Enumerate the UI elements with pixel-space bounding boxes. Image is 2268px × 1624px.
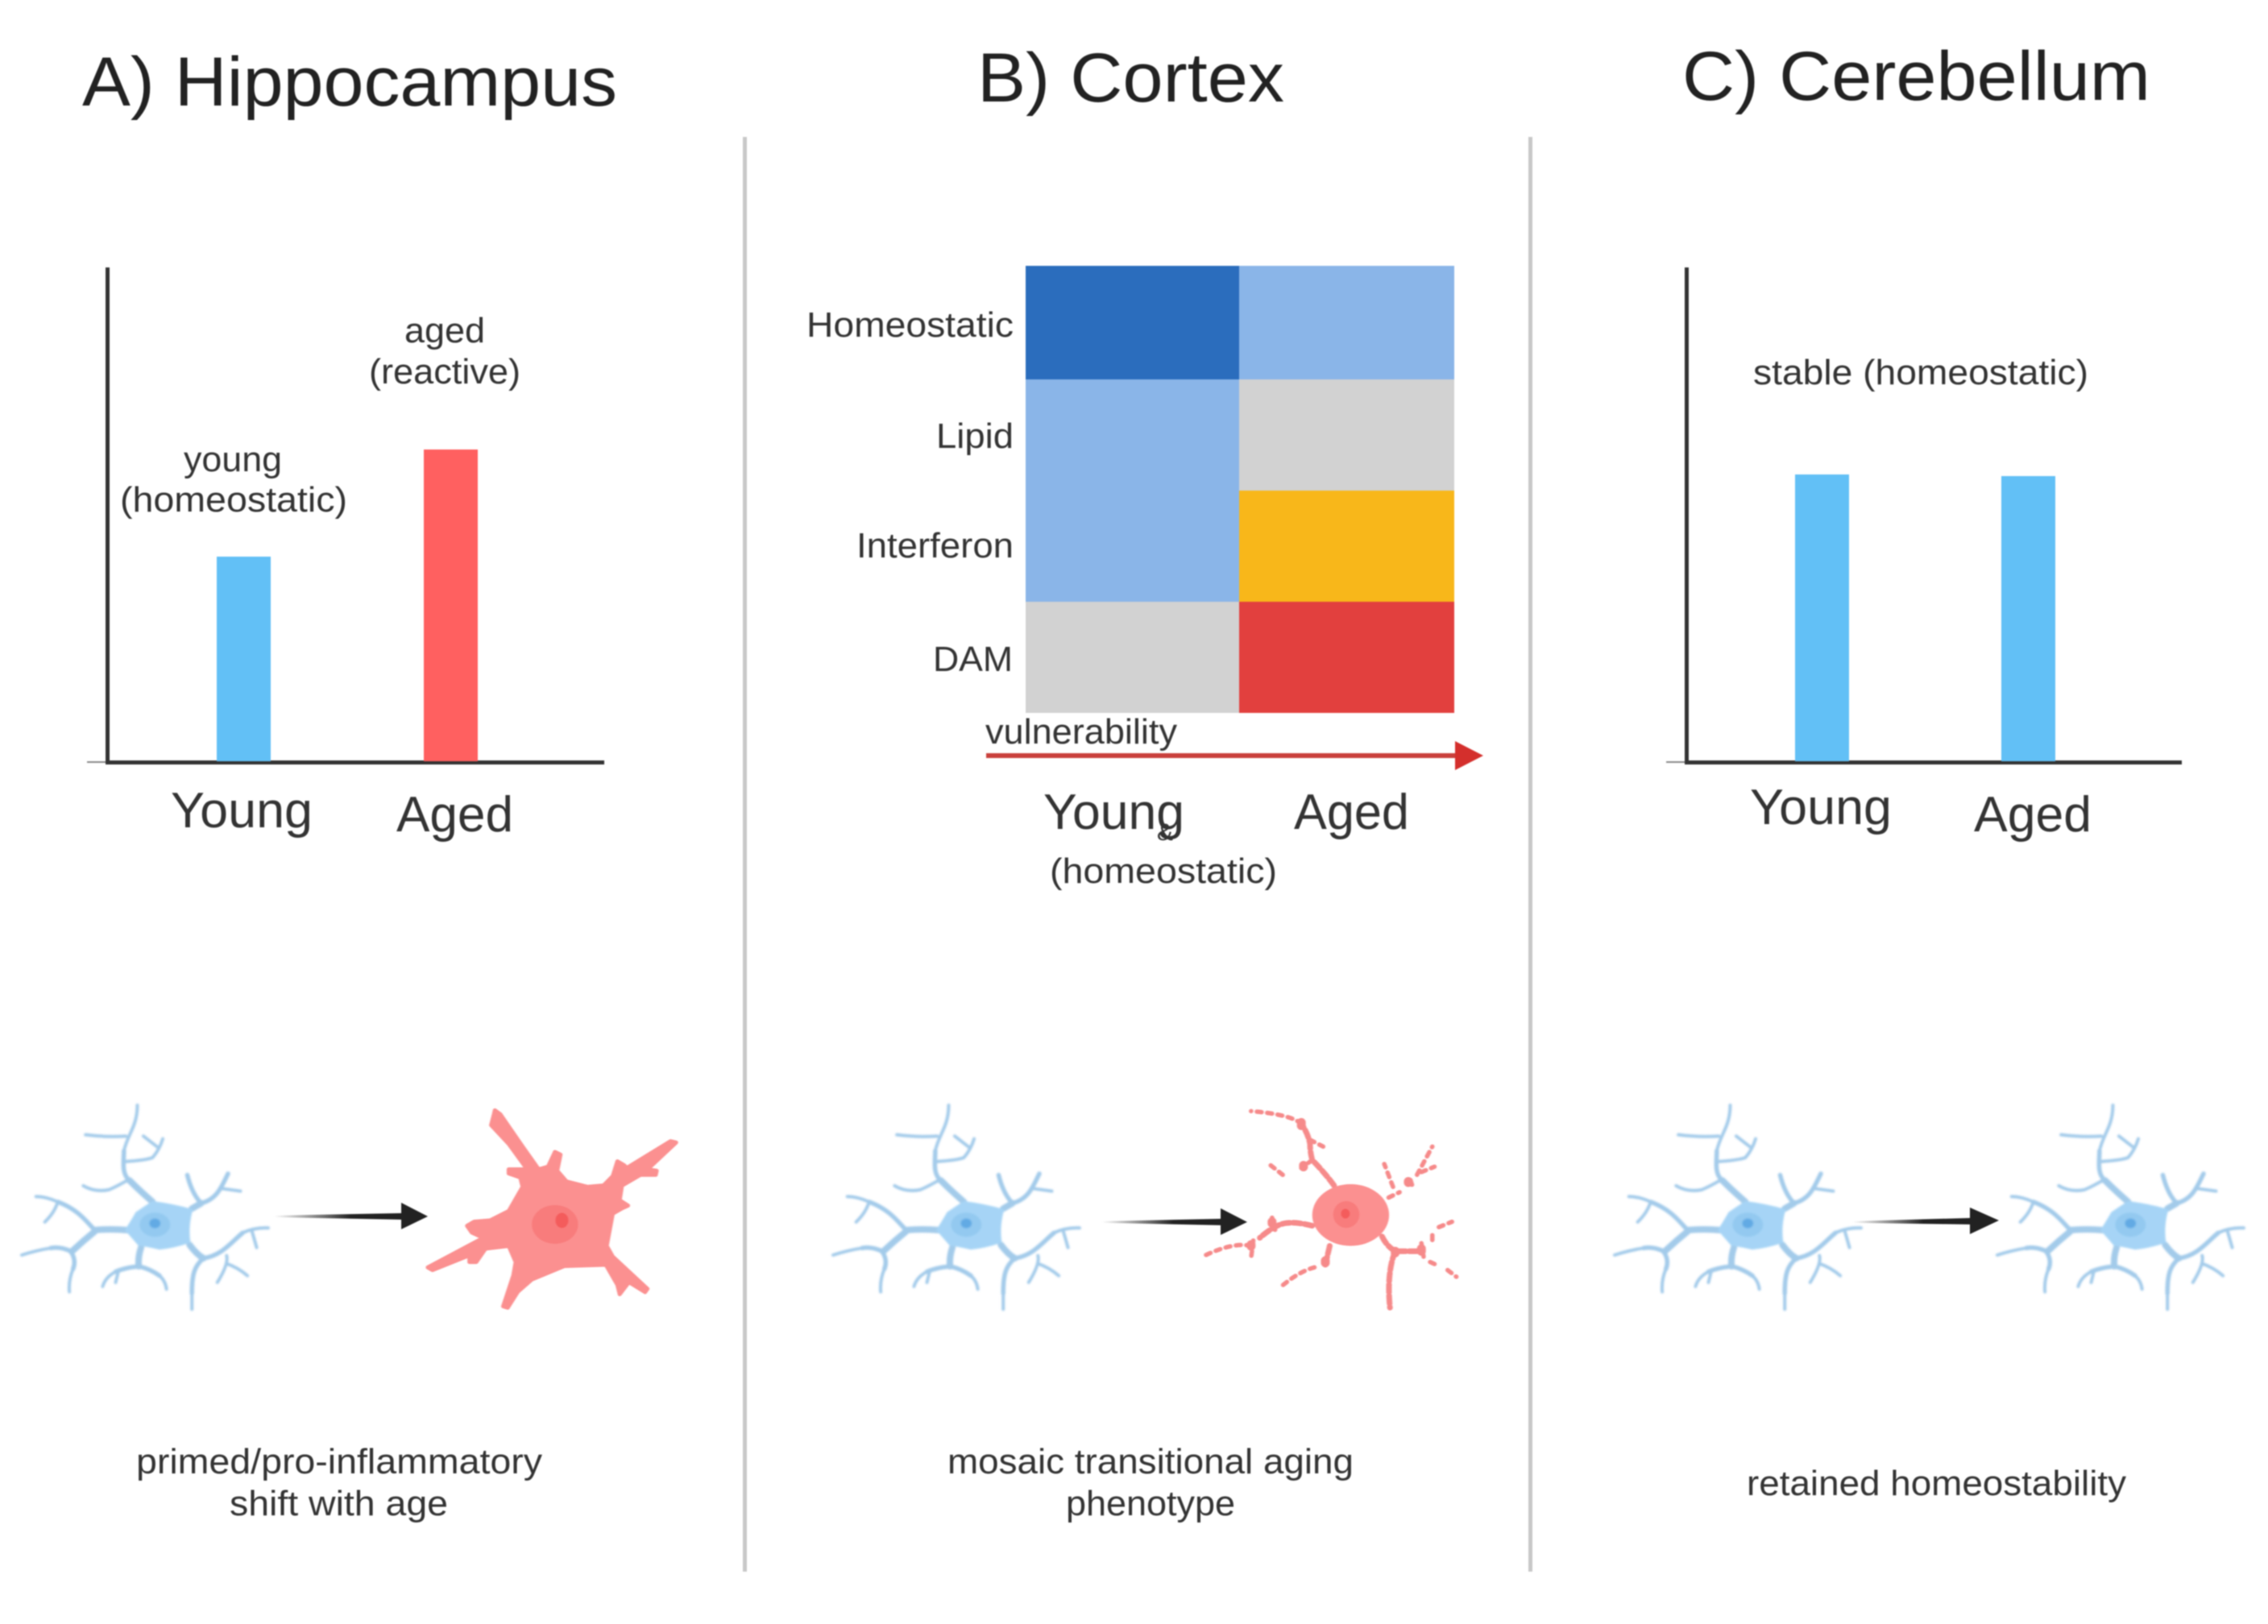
x label: Aged: Aged — [1294, 785, 1409, 840]
label: vulnerability: vulnerability — [985, 712, 1177, 752]
caption: hippocampus: primed/pro-inflammatory — [136, 1442, 542, 1481]
caption: hippocampus: shift with age — [230, 1484, 448, 1523]
caption: hippocampus — [136, 1442, 542, 1523]
label: aged reactive: (reactive) — [369, 352, 520, 392]
title: A) Hippocampus: A) Hippocampus — [82, 44, 617, 121]
icon: cerebellum aged microglia — [1997, 1105, 2244, 1309]
arrow: hippocampus — [274, 1203, 428, 1229]
arrow: cortex — [1102, 1208, 1247, 1235]
label: aged reactive: aged — [404, 311, 485, 350]
x label: Young: Young — [1043, 785, 1184, 840]
row label: Interferon: Interferon — [856, 526, 1014, 566]
label: aged reactive — [369, 311, 520, 392]
label: young homeostatic: (homeostatic) — [120, 480, 347, 520]
caption: cortex — [947, 1442, 1354, 1523]
row label: Homeostatic: Homeostatic — [806, 305, 1014, 345]
caption: cortex: mosaic transitional aging — [947, 1442, 1354, 1481]
x label: Aged: Aged — [396, 787, 513, 843]
panel: hippocampus bar chart — [87, 267, 604, 843]
x label: Young: Young — [171, 783, 313, 839]
panel: cortex heatmap — [806, 266, 1483, 891]
panel: cerebellum bar chart — [1666, 267, 2182, 843]
caption: cortex: phenotype — [1066, 1484, 1235, 1523]
label: young homeostatic: young — [184, 440, 282, 479]
icon: cerebellum young microglia — [1615, 1105, 1861, 1309]
caption: cerebellum: retained homeostability — [1747, 1464, 2126, 1503]
row label: Lipid: Lipid — [936, 416, 1014, 456]
icon: hippocampus aged reactive microglia — [428, 1110, 676, 1307]
title: C) Cerebellum: C) Cerebellum — [1682, 38, 2150, 115]
title: B) Cortex: B) Cortex — [977, 39, 1284, 117]
row label: DAM: DAM — [933, 640, 1013, 679]
label: (homeostatic): (homeostatic) — [1050, 851, 1277, 891]
ampersand: & — [1157, 819, 1173, 846]
arrow: vulnerability — [986, 741, 1483, 770]
icon: cortex aged dystrophic microglia — [1205, 1111, 1457, 1307]
bar: aged — [2001, 476, 2055, 761]
icon: cortex young microglia — [833, 1105, 1080, 1309]
label: young homeostatic — [120, 440, 347, 520]
x label: Aged: Aged — [1974, 787, 2092, 843]
icon: hippocampus young microglia — [22, 1105, 268, 1309]
bar: young — [217, 557, 271, 761]
bar: young — [1795, 474, 1849, 761]
divider left — [743, 137, 747, 1572]
heatmap cells — [1026, 266, 1454, 713]
x label: Young: Young — [1750, 780, 1892, 835]
label: stable: stable (homeostatic) — [1753, 353, 2088, 392]
bar: aged — [424, 450, 478, 761]
arrow: cerebellum — [1853, 1208, 1999, 1234]
divider right — [1528, 137, 1532, 1572]
